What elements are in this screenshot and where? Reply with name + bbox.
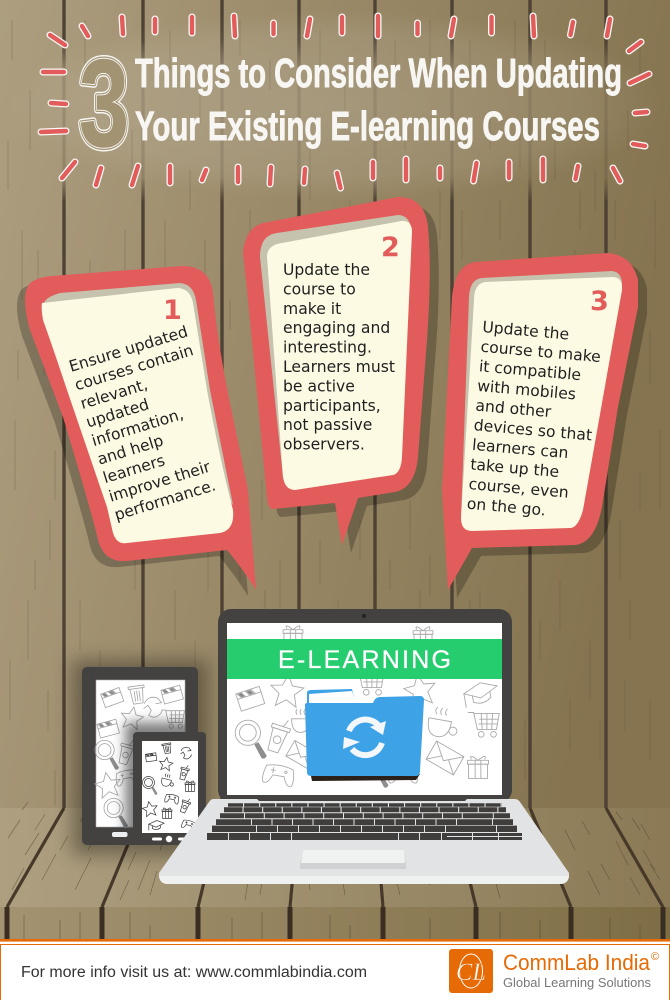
logo: CommLab India: CL (456, 959, 486, 986)
speech bubble 3: take up the (470, 455, 560, 481)
speech bubble 2: course to (283, 280, 356, 298)
speech bubble 1: information, (90, 405, 186, 450)
wall plank gaps (64, 0, 606, 808)
footer link text: For more info visit us at: www.commlabindia.com (21, 964, 367, 981)
speech bubble 3: on the go. (466, 495, 547, 520)
speech bubble 2: not passive (283, 416, 372, 434)
keyboard (207, 805, 522, 838)
speech bubble 1: learners (101, 451, 167, 487)
title numeral 3: 3 (79, 35, 129, 173)
speech bubble 1: and help (95, 431, 166, 469)
tablet (72, 660, 210, 855)
speech bubble 2: interesting. (283, 339, 372, 357)
speech bubble 2: make it (283, 300, 341, 318)
speech bubble 1: courses contain (73, 341, 196, 394)
speech bubble 3 (442, 253, 647, 598)
speech bubble 3: it compatible (478, 357, 582, 384)
speech bubble 1: 1 (163, 295, 182, 326)
logo: CommLab India (449, 949, 659, 993)
speech bubble 3: Update the (482, 318, 570, 344)
speech bubble 3: 3 (590, 286, 609, 317)
logo: CommLab India: Global Learning Solutions (503, 975, 651, 990)
smartphone (133, 732, 206, 845)
speech bubble 2: observers. (283, 436, 365, 454)
speech bubble 1: Ensure updated (67, 323, 190, 376)
title numeral 3: 3 (79, 35, 129, 173)
logo: CommLab India: © (651, 951, 659, 963)
speech bubble 1: performance. (112, 476, 218, 524)
speech bubble 2 (243, 197, 439, 553)
title numeral 3: 3 (79, 35, 129, 173)
speech bubble 3: course, even (468, 475, 569, 502)
speech bubble 2: Update the (283, 261, 370, 279)
speech bubble 3: and other (475, 397, 552, 421)
icon: blue folder with refresh arrows (305, 689, 424, 781)
green banner (227, 639, 502, 679)
speech bubble 2: Learners must (283, 358, 395, 376)
title numeral 3: 3 (79, 35, 129, 173)
speech bubble 3: with mobiles (477, 377, 577, 403)
speech bubble 1: improve their (107, 458, 213, 506)
title text (135, 50, 622, 149)
speech bubble 2: engaging and (283, 319, 390, 337)
speech bubble 1: relevant, (78, 375, 150, 413)
speech bubble 1: updated (84, 395, 151, 431)
speech bubble 3: course to make (480, 338, 602, 366)
title glow (5, 10, 665, 200)
laptop lid and screen (218, 609, 512, 803)
speech bubble 3: devices so that (473, 416, 593, 444)
screen doodle icons (235, 626, 500, 788)
title decoration: red dashes (41, 16, 649, 188)
green banner: E-LEARNING (278, 646, 451, 674)
speech bubble 2: 2 (381, 232, 400, 263)
speech bubble 2: be active (283, 377, 355, 395)
speech bubble 1 (17, 266, 256, 596)
footer (0, 939, 670, 1000)
laptop base (159, 799, 569, 884)
wooden table (0, 802, 670, 939)
speech bubble 3: learners can (471, 436, 569, 462)
logo: CommLab India: CommLab India (503, 950, 650, 975)
speech bubble 2: participants, (283, 397, 381, 415)
trackpad (300, 850, 406, 869)
